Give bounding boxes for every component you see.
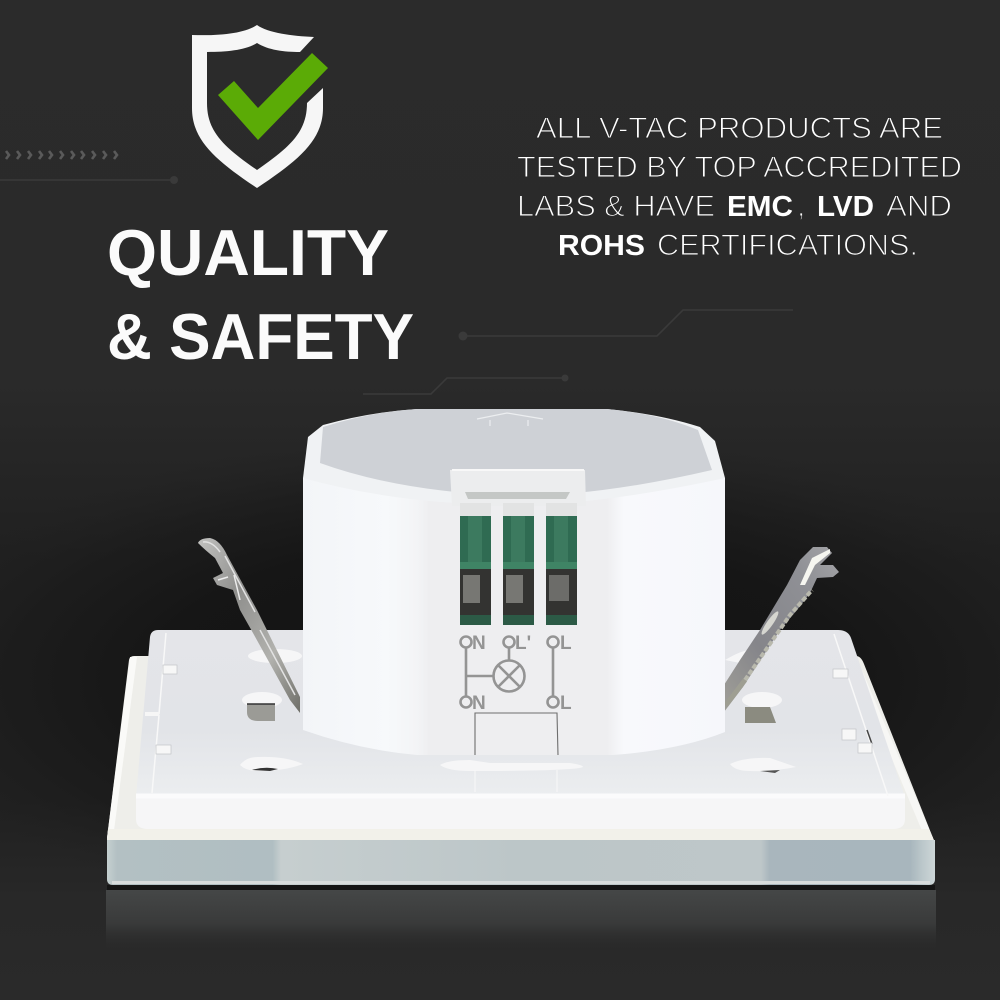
glass base plate [107,656,935,885]
wiring diagram: L [560,633,572,654]
wiring diagram: L' [515,633,531,654]
right metal clip [724,547,839,712]
decorative chevron row [6,151,117,159]
title [107,216,414,373]
product: motion sensor switch [107,409,935,885]
plate notches [156,665,872,754]
wiring diagram: N [472,693,486,714]
plate holes [240,649,796,771]
title: & SAFETY [107,300,414,373]
certification text block: LABS & HAVE [517,190,715,223]
certification text block: ROHS [558,230,645,262]
left metal clip [198,538,300,713]
terminal latch [450,470,586,506]
module door [475,713,558,755]
certification text block: EMC [727,191,793,223]
certification text block: AND [886,190,952,223]
product reflection [106,885,936,952]
wiring terminals [460,503,577,625]
certification text block [517,112,962,262]
wiring diagram: N [472,633,486,654]
certification text block: ALL V-TAC PRODUCTS ARE [536,112,943,145]
wiring diagram: L [560,693,572,714]
certification text block: CERTIFICATIONS. [657,229,918,262]
certification text block: , [797,190,805,223]
certification text block: TESTED BY TOP ACCREDITED [517,151,962,184]
certification text block: LVD [817,191,874,223]
sensor module body [303,409,725,755]
title: QUALITY [107,216,389,289]
wiring diagram [460,633,572,714]
decorative circuit lines [0,176,793,394]
icon: shield with check mark [192,25,328,188]
white cover plate [136,630,905,829]
